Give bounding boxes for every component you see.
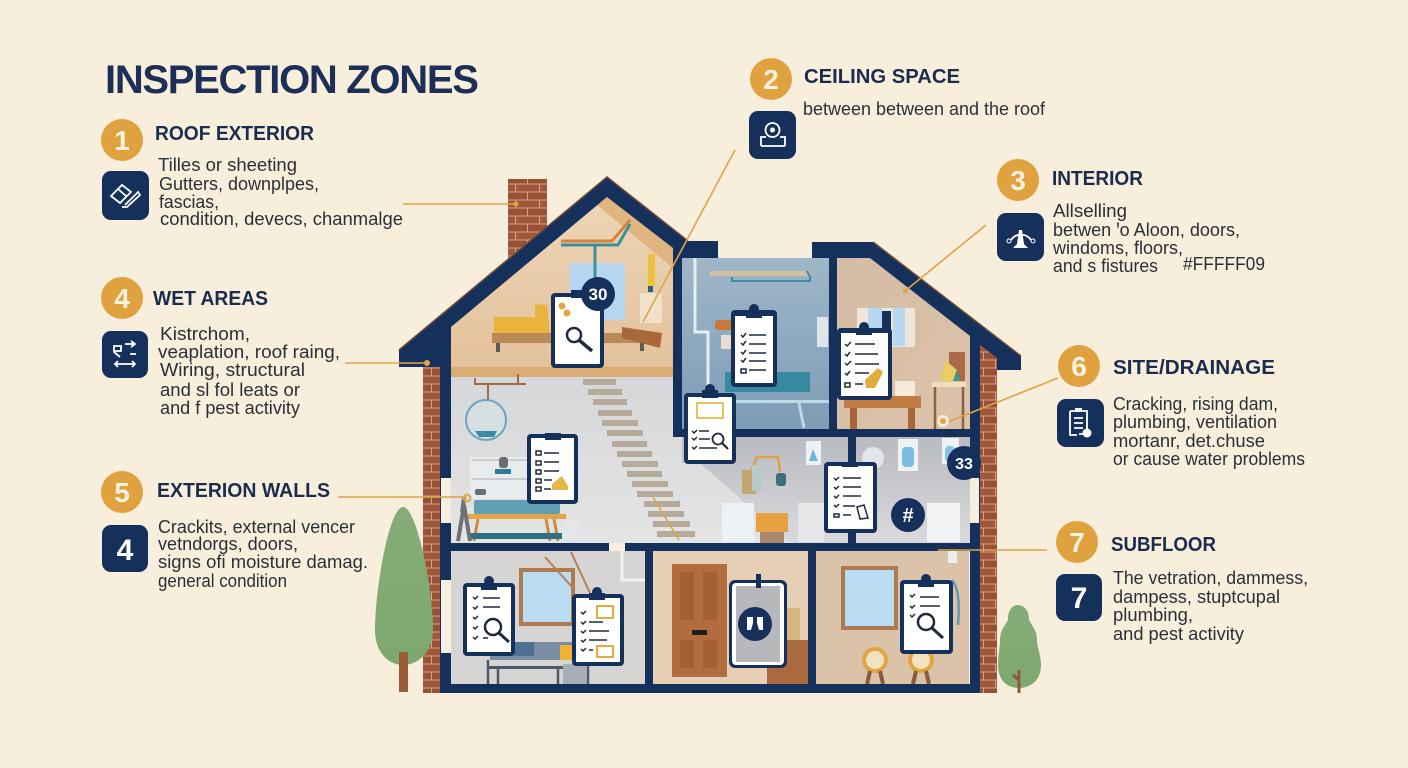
clipboard: blue room [731,304,777,387]
number badge 4 [101,277,143,319]
text block: wet areas: veaplation, roof raing, [158,341,340,362]
bed platform [492,333,657,343]
arrow: desk one [545,557,573,588]
text block: interior: #FFFFF09 [1183,253,1265,274]
bathroom back wall shading [682,437,970,543]
icon: interior light [997,213,1044,261]
text block: subfloor [1113,567,1308,644]
number badge 1 [101,119,143,161]
heading: site/drainage: SITE/DRAINAGE [1113,357,1275,379]
arrow: desk two [571,552,590,593]
clipboard: lower bedroom [527,433,578,504]
cream panel [640,293,662,323]
text block: wet areas: and sl fol leats or [160,379,300,400]
right roof [812,242,1021,684]
title: INSPECTION ZONES [105,58,478,102]
icon: ceiling hatch [749,111,796,159]
text block: exterior walls [158,516,368,591]
icon: number tile 4: 4 [117,534,134,567]
left roof [399,177,718,437]
wall pipework [751,457,780,472]
text block: roof exterior: condition, devecs, chanmalge [160,208,403,229]
zone 2: ceiling space [749,58,1046,159]
yellow mattress [494,304,550,333]
text block: site/drainage: plumbing, ventilation [1113,411,1277,432]
number badge 2 [750,58,792,100]
text block: site/drainage [1113,393,1305,469]
text block: roof exterior: Gutters, downplpes, [159,173,319,194]
arrow: zone 4 [345,360,430,366]
text block: subfloor: dampess, stuptcupal [1113,586,1280,607]
stools [862,647,934,684]
arrow: zone 2 [643,150,735,322]
heading: interior: INTERIOR [1052,168,1144,190]
callout leader lines [338,150,1058,593]
foundation [440,684,980,693]
bathroom divider [848,437,856,543]
number badge 2: 2 [763,64,779,95]
zone 4: wet areas [101,277,340,418]
right ground room [816,551,969,684]
text block: wet areas [158,323,340,418]
right brick wall [979,344,997,693]
icon: wet area pipes [102,331,148,378]
shelves [470,457,530,499]
zone 6: site and drainage [1057,345,1305,469]
right window [841,566,898,630]
number badge 7 [1056,521,1098,563]
table ornaments [949,352,965,381]
lower bedroom furniture [458,457,578,541]
badge: hash: # [902,505,914,527]
text block: exterior walls: general condition [158,570,287,591]
dividing wall [829,258,837,437]
text block: interior: Allselling [1053,200,1127,221]
right tree [998,605,1041,693]
teal bed [474,500,560,514]
chimney [508,179,547,264]
white pipe [622,551,645,580]
desk [487,642,590,684]
lower floor room [451,377,970,543]
number badge 5 [101,471,143,513]
icon: drainage checklist [1057,399,1104,447]
ducting pipes [561,220,630,241]
text block: interior: and s fistures [1053,255,1158,276]
text block: wet areas: Wiring, structural [160,359,305,380]
attic window [570,263,625,320]
text block: subfloor: and pest activity [1113,623,1245,644]
number badge 6: 6 [1071,351,1087,382]
house cutaway [399,177,1021,693]
text block: site/drainage: or cause water problems [1113,448,1305,469]
rafter [597,196,673,268]
front door [672,564,727,677]
badge: hash [891,498,925,532]
sideboard and plant [767,640,808,684]
orange cushion [715,320,733,330]
text block: ceiling space: between between and the roof [803,98,1046,119]
ceiling bar [710,271,810,276]
text block: wet areas: Kistrchom, [160,323,250,344]
arrow: stairs [653,497,679,540]
text block: exterior walls: signs ofi moisture damag. [158,551,368,572]
ground wall right [808,551,816,684]
heading: wet areas: WET AREAS [153,288,268,310]
clipboard: bathroom [824,462,877,533]
text block: wet areas: and f pest activity [160,397,301,418]
ground floor rooms [451,551,969,684]
icon: number tile 4 [102,525,148,572]
number badge 6 [1058,345,1100,387]
zone 1: roof exterior [101,119,403,229]
roof edge highlight [873,242,1021,356]
text block: site/drainage: Cracking, rising dam, [1113,393,1278,414]
text block: interior: windoms, floors, [1052,237,1183,258]
left wall window upper [441,478,451,523]
text block: exterior walls: Crackits, external vencer [158,516,355,537]
icon: number tile 7: 7 [1071,582,1087,615]
house structure [399,177,1021,693]
icon: roof tiles [102,171,149,220]
clipboard: ground desk [572,587,624,666]
ground floor ceiling left [451,543,609,551]
blue room [682,258,830,429]
skylight opening [718,248,812,258]
number badge 3: 3 [1010,165,1026,196]
left wall [440,327,451,693]
zone 5: exterior walls [101,471,368,591]
badge: 33 [947,446,981,480]
text block: site/drainage: mortanr, det.chuse [1113,430,1265,451]
clipboard: stairs [684,384,736,464]
downpipe [952,580,959,625]
heading: roof exterior: ROOF EXTERIOR [155,123,315,145]
right wall window [970,478,979,523]
clipboard: ground right [900,574,953,654]
wooden desk [844,396,921,408]
icon: number tile 7 [1056,574,1102,621]
badge: 33: 33 [955,456,973,473]
left tree [375,507,433,692]
hanging ring lamp [466,374,526,440]
joist band [450,367,673,377]
number badge 4: 4 [114,283,130,314]
text block: interior [1052,200,1265,276]
ground floor ceiling right [625,543,970,551]
stairs [583,379,695,537]
left ground room [451,551,645,684]
brown chest [622,327,662,348]
arrow: zone 5 [338,494,470,502]
clipboard: attic: 30 [589,285,607,304]
zone 3: interior [997,159,1265,276]
heading: subfloor: SUBFLOOR [1111,534,1217,556]
text block: exterior walls: vetndorgs, doors, [158,533,298,554]
arrow: zone 7 [938,549,1047,551]
white pipe [695,258,708,395]
roof edge highlight [399,177,688,350]
wall sinks [806,441,821,465]
beige room [837,258,970,429]
centre ground room [653,551,808,684]
tablet: front door [729,574,787,668]
bench with box [722,503,754,542]
inspector figure [458,498,470,541]
upper floor [682,429,970,437]
teal sofa [725,372,810,392]
text block: roof exterior: Tilles or sheeting [158,154,297,175]
bathroom fixtures [466,374,960,543]
plant on shelf [495,469,511,474]
side table [932,382,966,387]
number badge 7: 7 [1069,527,1085,558]
arrow: zone 6 [937,378,1058,427]
left window [519,568,575,626]
number badge 5: 5 [114,477,130,508]
ground wall left [645,551,653,684]
clipboard: beige room [837,322,892,400]
wall panel [817,317,828,347]
left brick wall [423,337,440,693]
text block: subfloor: plumbing, [1113,604,1193,625]
arrow: zone 1 [403,202,518,206]
text block: interior: betwen ꞌo Aloon, doors, [1053,219,1240,240]
room window [857,308,915,347]
zone 7: subfloor [1056,521,1308,644]
text block: roof exterior [158,154,403,229]
text block: subfloor: The vetration, dammess, [1113,567,1308,588]
arrow: zone 3 [902,225,986,294]
heading: exterior walls: EXTERION WALLS [157,480,330,502]
number badge 1: 1 [114,125,130,156]
clipboard: attic [551,277,615,368]
attic room [450,196,673,377]
text block: roof exterior: fascias, [159,191,219,212]
heading: ceiling space: CEILING SPACE [804,66,960,88]
left wall window lower [441,580,451,653]
yellow strut [648,254,655,286]
clipboard: ground left [463,576,515,656]
number badge 3 [997,159,1039,201]
